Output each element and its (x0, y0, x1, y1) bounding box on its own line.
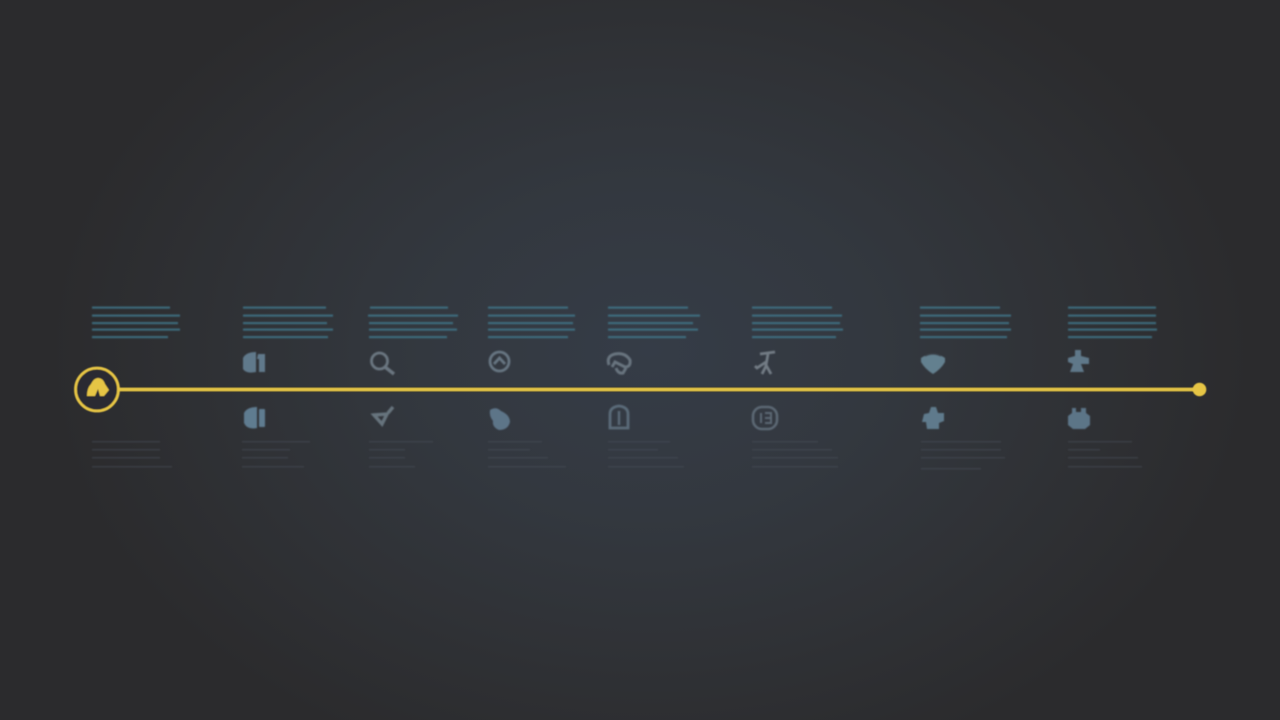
icon: top 8 puzzle (1068, 350, 1089, 372)
bottom text block 6 (752, 441, 838, 468)
icon: bottom 4 blob (490, 408, 510, 430)
top text block 5 (608, 306, 700, 338)
icon: top 7 shield (921, 354, 945, 374)
top text block 1 (92, 306, 180, 338)
top text block 2 (243, 306, 333, 338)
top text block 3 (368, 306, 458, 338)
timeline line (118, 386, 1199, 392)
icon: top 4 ring (490, 352, 509, 371)
top text block 6 (752, 306, 843, 338)
top text block group (92, 306, 1157, 338)
timeline start node (76, 368, 118, 411)
top text block 7 (920, 306, 1011, 338)
icon: top 5 knot (608, 354, 630, 373)
top text block 8 (1068, 306, 1157, 338)
icon: top 2 tablet (243, 352, 265, 373)
icon: bottom 5 cabinet (610, 406, 628, 428)
timeline end dot (1193, 383, 1206, 396)
bottom text block 7 (921, 441, 1005, 470)
icon: bottom 8 bag (1068, 408, 1090, 429)
icon: top 3 magnifier (372, 353, 394, 374)
top text block 4 (488, 306, 575, 338)
icon: bottom 7 puzzle star (922, 407, 944, 429)
icon: start node glyph (87, 378, 109, 396)
bottom text block 3 (369, 441, 433, 468)
icon: bottom 3 megaphone (374, 407, 393, 424)
icon: top 6 figure (755, 352, 775, 374)
icon: bottom 2 shape (244, 407, 265, 428)
bottom text block 1 (92, 441, 172, 468)
bottom text block 8 (1068, 441, 1142, 468)
icon: bottom 6 badge (753, 407, 777, 429)
bottom text block 2 (242, 441, 310, 468)
bottom text block group (92, 441, 1142, 470)
bottom text block 4 (488, 441, 566, 468)
bottom text block 5 (608, 441, 684, 468)
